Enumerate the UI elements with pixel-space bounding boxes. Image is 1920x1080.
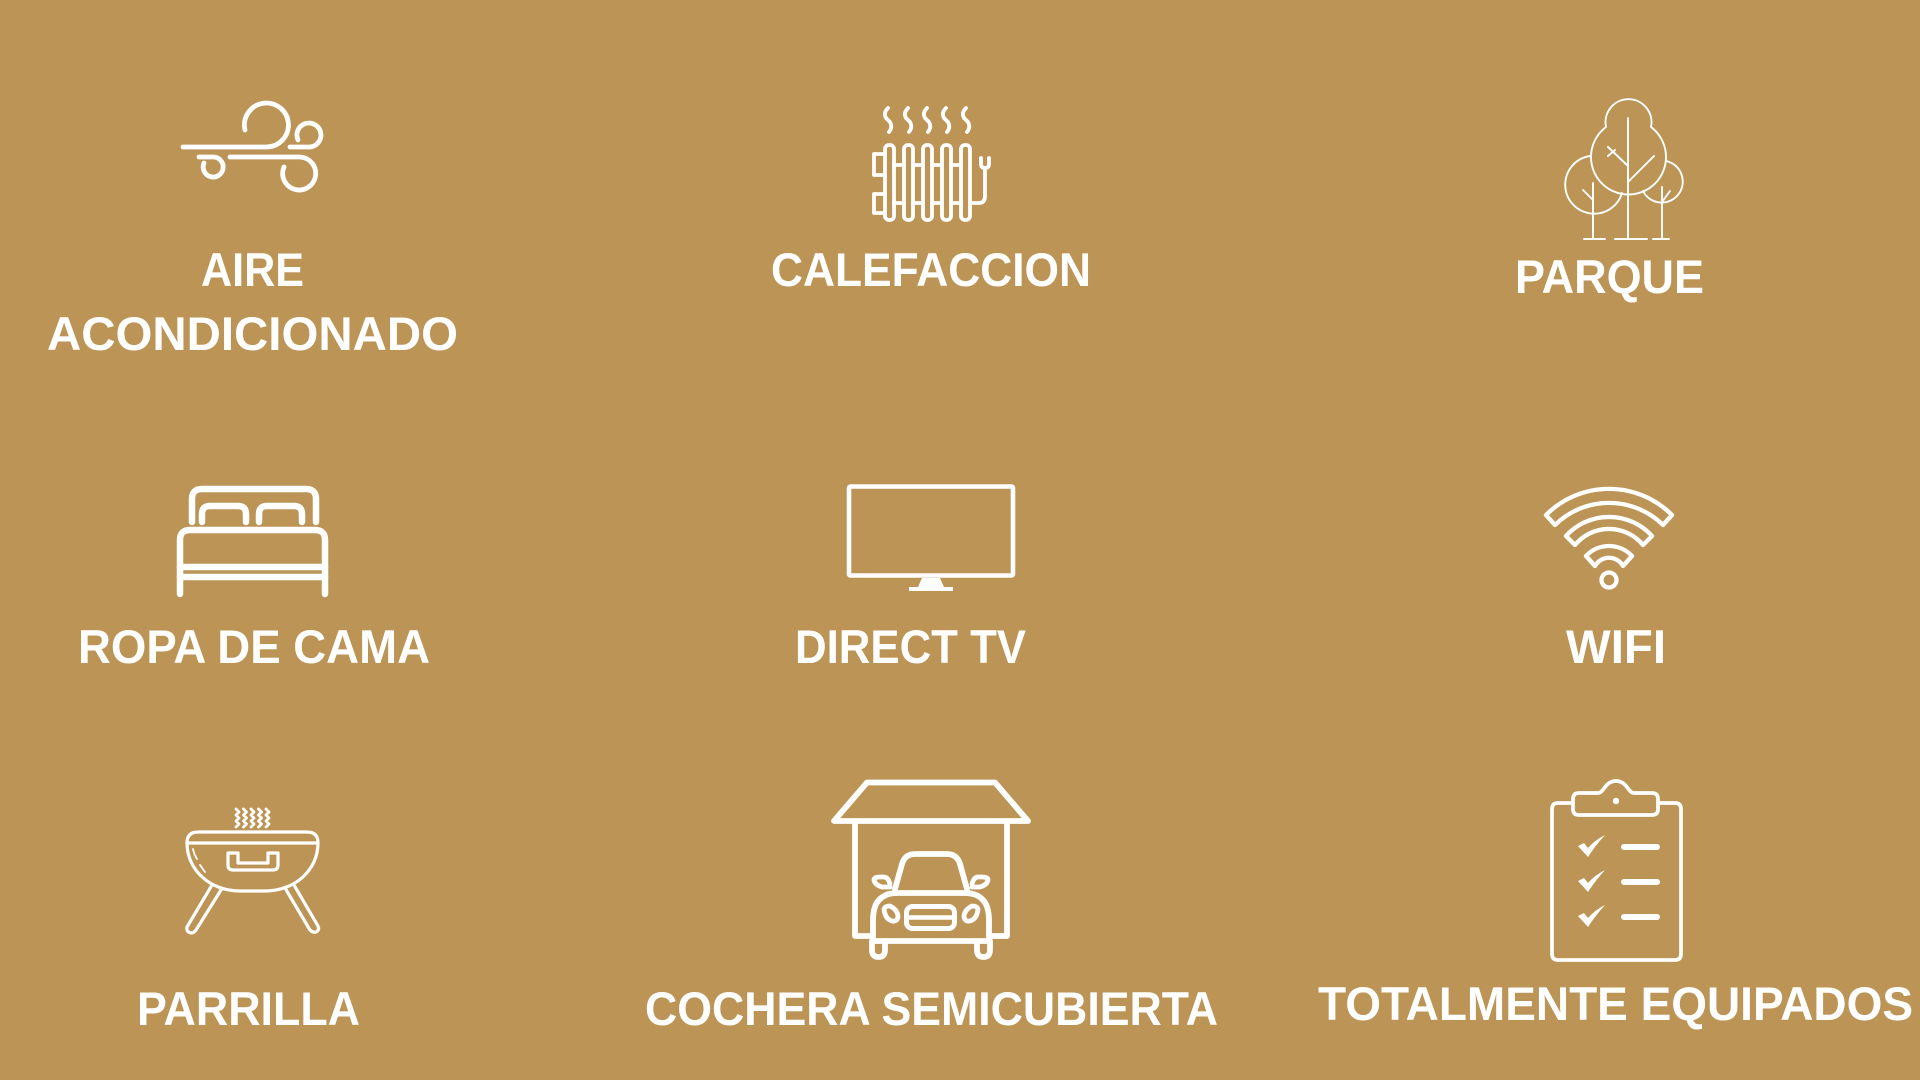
icon: trees (1565, 99, 1683, 239)
panel: parque (1515, 99, 1704, 303)
panel: calefaccion (771, 108, 1091, 296)
icon: wifi (1546, 489, 1672, 588)
panel: cochera semicubierta (645, 782, 1218, 1035)
icon: clipboard checklist (1552, 781, 1681, 960)
panel: wifi (1546, 489, 1672, 673)
icon: grill (187, 809, 319, 933)
label: direct tv: DIRECT TV (795, 620, 1027, 673)
icon: radiator (874, 108, 989, 220)
icon: television (849, 486, 1013, 591)
label: ropa de cama: ROPA DE CAMA (78, 620, 430, 673)
label: aire acondicionado: AIRE (201, 243, 304, 296)
panel: parrilla (137, 809, 360, 1035)
label: aire acondicionado (47, 243, 458, 360)
panel: ropa de cama (78, 489, 430, 673)
panel: direct tv (795, 486, 1027, 673)
label: wifi: WIFI (1566, 620, 1666, 673)
icon: wind (183, 103, 321, 190)
panel: aire acondicionado (47, 103, 458, 360)
label: aire acondicionado: ACONDICIONADO (47, 307, 458, 360)
label: parrilla: PARRILLA (137, 982, 360, 1035)
label: calefaccion: CALEFACCION (771, 243, 1091, 296)
label: parque: PARQUE (1515, 250, 1704, 303)
icon: garage with car (834, 782, 1028, 957)
icon: bed (180, 489, 325, 594)
panel: totalmente equipados (1318, 781, 1913, 1030)
label: totalmente equipados: TOTALMENTE EQUIPADOS (1318, 977, 1913, 1030)
label: cochera semicubierta: COCHERA SEMICUBIERTA (645, 982, 1218, 1035)
